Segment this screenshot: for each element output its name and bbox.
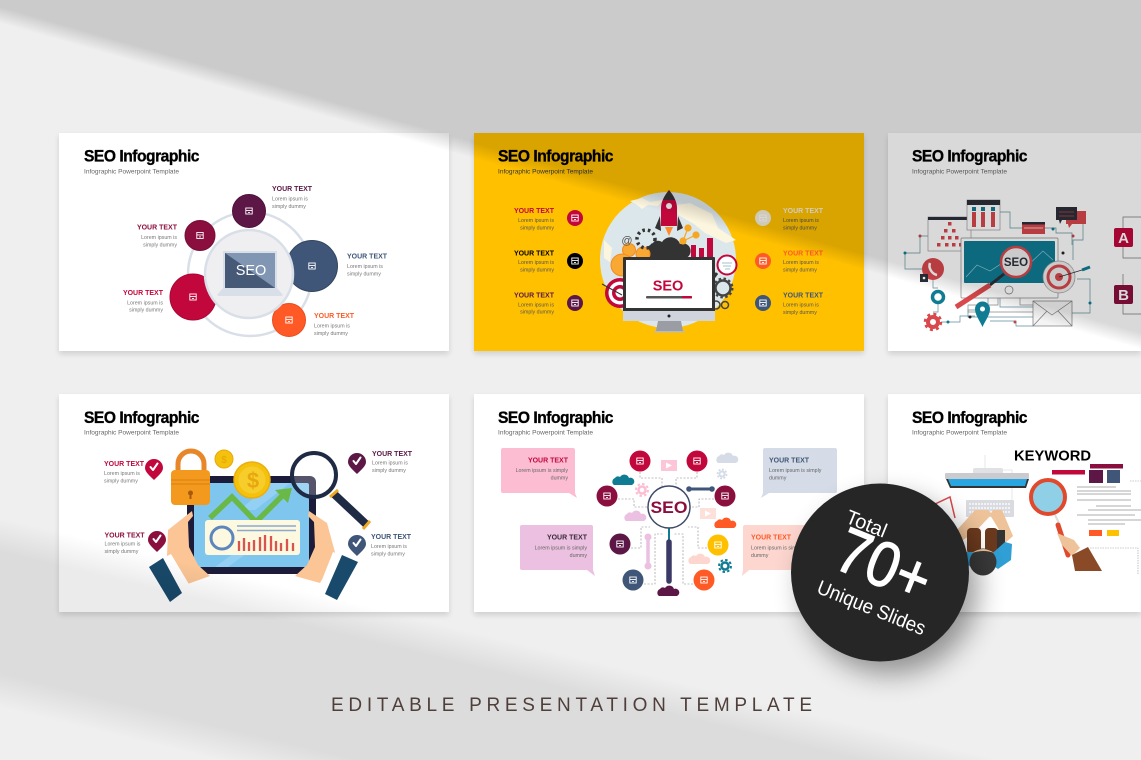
labels right: Lorem ipsum is (783, 302, 819, 308)
heading: SEO Infographic (912, 409, 1027, 427)
node icons (190, 208, 315, 323)
callout: pink: Lorem ipsum is simply (516, 468, 568, 474)
magnifier (711, 256, 736, 281)
gears (712, 278, 732, 309)
heading: SEO Infographic (498, 148, 613, 166)
padlock (171, 451, 210, 505)
heading: SEO Infographic (84, 148, 199, 166)
label: lower left: Lorem ipsum is (127, 300, 163, 306)
footer caption: EDITABLE PRESENTATION TEMPLATE (331, 695, 812, 716)
monitor (961, 238, 1058, 312)
clouds (612, 453, 738, 596)
label: left (137, 224, 178, 248)
label: left: YOUR TEXT (137, 224, 178, 232)
labels: simply dummy (372, 468, 406, 474)
small coin: $ (221, 455, 227, 466)
callout: peach: Lorem ipsum is simply (751, 546, 804, 552)
panel: slide 6 keyword (888, 394, 1141, 612)
label: right (347, 254, 388, 278)
badge total: Total (843, 506, 890, 543)
callout: blue gray (761, 448, 837, 498)
label: top: simply dummy (272, 204, 306, 210)
labels left: simply dummy (520, 226, 554, 232)
globe (600, 192, 736, 328)
labels left: Lorem ipsum is (518, 218, 554, 224)
heading: SEO Infographic (912, 148, 1027, 166)
labels right: YOUR TEXT (783, 208, 824, 215)
label: lower left: YOUR TEXT (123, 290, 164, 297)
callout: blue gray: Lorem ipsum is simply (769, 468, 822, 474)
label: lower left: simply dummy (129, 308, 163, 314)
labels: Lorem ipsum is (372, 460, 408, 466)
growth arrow (210, 488, 292, 522)
box B (1114, 285, 1133, 304)
lock icon (920, 274, 928, 282)
label: lower right (314, 313, 355, 337)
smoke cloud (647, 237, 691, 258)
chat bubbles (1056, 207, 1086, 228)
envelope (1033, 301, 1072, 326)
subtitle: Infographic Powerpoint Template (84, 430, 179, 436)
pins (145, 453, 366, 556)
callout: peach: dummy (751, 553, 769, 559)
panel: slide 4 tablet (59, 394, 449, 612)
labels left: simply dummy (520, 310, 554, 316)
play icons (661, 460, 716, 519)
org chart panel (928, 217, 971, 251)
label: right: YOUR TEXT (347, 254, 388, 260)
callout: pink: YOUR TEXT (528, 458, 569, 464)
label: top: Lorem ipsum is (272, 196, 308, 202)
magnifier (292, 453, 370, 529)
monitor: SEO (653, 278, 683, 294)
dots (637, 230, 655, 248)
target (1043, 261, 1090, 293)
person from above (957, 510, 1013, 576)
gear (925, 314, 941, 330)
left circles (567, 210, 583, 311)
callout: purple: Lorem ipsum is simply (535, 546, 587, 552)
badge: 70+ unique slides (791, 484, 969, 662)
label: lower right: Lorem ipsum is (314, 324, 350, 330)
laptop (217, 251, 283, 296)
big coin: $ (247, 468, 259, 493)
label: top (272, 186, 313, 210)
subtitle: Infographic Powerpoint Template (84, 168, 179, 176)
label: lower right: simply dummy (314, 331, 348, 337)
keyword heading: KEYWORD (1014, 448, 1091, 464)
slide shadows (59, 136, 1141, 615)
badge number: 70+ (826, 513, 942, 616)
node circles (170, 194, 338, 336)
right hand (295, 511, 358, 600)
heading: SEO Infographic (498, 409, 613, 427)
callout: blue gray: YOUR TEXT (769, 458, 810, 464)
callout: blue gray: dummy (769, 476, 787, 482)
left hand (149, 511, 210, 602)
callout: pink (501, 448, 577, 498)
seo magnifier (648, 486, 690, 581)
search magnifier and hand (1031, 480, 1102, 571)
badge shadow (802, 498, 978, 674)
dashed connectors (618, 472, 714, 584)
labels right: YOUR TEXT (783, 250, 824, 258)
circuit nodes (904, 228, 1092, 324)
labels left: Lorem ipsum is (518, 302, 554, 308)
labels: simply dummy (104, 478, 138, 484)
outer ring (188, 212, 312, 336)
wrenches (644, 486, 715, 570)
label: top: YOUR TEXT (272, 186, 313, 193)
panel: slide 2 yellow rocket (474, 133, 864, 351)
label: lower left (123, 290, 164, 314)
callout: purple: YOUR TEXT (547, 534, 588, 542)
callout: peach (742, 525, 817, 576)
labels (104, 451, 413, 558)
labels: Lorem ipsum is (104, 542, 141, 548)
labels right (783, 208, 824, 316)
heading: SEO Infographic (84, 409, 199, 427)
seo magnifier: SEO (1004, 257, 1028, 269)
labels right: Lorem ipsum is (783, 260, 819, 266)
labels right: simply dummy (783, 310, 817, 316)
tablet (187, 476, 316, 574)
node circles (596, 450, 736, 590)
box connectors (1123, 217, 1141, 314)
credit card (1022, 222, 1045, 234)
subtitle: Infographic Powerpoint Template (498, 430, 593, 436)
inner circle (205, 230, 293, 318)
location pin (975, 302, 990, 327)
labels: YOUR TEXT (104, 532, 145, 540)
labels right: YOUR TEXT (783, 292, 824, 300)
network nodes (680, 225, 699, 244)
color blocks (1052, 464, 1123, 536)
callout: purple: dummy (570, 553, 587, 559)
labels: Lorem ipsum is (371, 544, 407, 550)
panel: slide 5 seo hub (474, 394, 864, 612)
labels left: YOUR TEXT (514, 292, 555, 300)
subtitle: Infographic Powerpoint Template (498, 168, 593, 176)
badge caption: Unique Slides (814, 577, 929, 640)
label: lower right: YOUR TEXT (314, 313, 355, 320)
labels left: YOUR TEXT (514, 208, 555, 215)
dashboard card (205, 520, 300, 555)
callout: pink: dummy (551, 476, 568, 482)
table panel (967, 200, 1000, 230)
text lines (1077, 487, 1141, 524)
callout: purple (520, 525, 595, 576)
box A: A (1118, 230, 1129, 247)
box A (1114, 228, 1133, 247)
big coin (234, 462, 270, 498)
label: right: simply dummy (347, 272, 381, 278)
keyboard (966, 500, 1014, 517)
right circles (755, 210, 771, 311)
labels right: simply dummy (783, 226, 817, 232)
callout: peach: YOUR TEXT (751, 534, 792, 542)
labels: YOUR TEXT (372, 451, 413, 458)
labels: simply dummy (371, 552, 405, 558)
labels left (514, 208, 555, 316)
at sign: @ (621, 235, 633, 247)
subtitle: Infographic Powerpoint Template (912, 430, 1007, 436)
overhead monitor (945, 455, 1029, 500)
laptop: SEO (236, 263, 266, 279)
labels right: Lorem ipsum is (783, 218, 819, 224)
seo magnifier: SEO (650, 499, 688, 517)
label: right: Lorem ipsum is (347, 264, 383, 270)
subtitle: Infographic Powerpoint Template (912, 168, 1007, 176)
target (602, 278, 635, 308)
rocket (655, 190, 683, 236)
labels left: simply dummy (520, 268, 554, 274)
monitor (623, 257, 715, 332)
gears (636, 470, 731, 572)
phone icon (922, 258, 944, 280)
labels: simply dummy (104, 549, 139, 555)
labels: YOUR TEXT (104, 461, 145, 468)
panel: slide 3 network diagram (888, 133, 1141, 351)
label: left: simply dummy (143, 242, 177, 248)
box B: B (1118, 287, 1129, 304)
teal ring (932, 292, 944, 302)
seo magnifier (956, 247, 1031, 307)
labels left: Lorem ipsum is (518, 260, 554, 266)
labels: YOUR TEXT (371, 534, 412, 541)
red paper (933, 497, 955, 518)
label: left: Lorem ipsum is (141, 235, 177, 241)
labels right: simply dummy (783, 268, 817, 274)
labels left: YOUR TEXT (514, 250, 555, 258)
circuit lines (905, 212, 1090, 326)
dashed frames (1090, 481, 1141, 575)
small coin (215, 450, 233, 468)
panel: slide 1 circular diagram (59, 133, 449, 351)
bar chart (691, 238, 713, 259)
coins (611, 244, 650, 276)
labels: Lorem ipsum is (104, 471, 140, 477)
